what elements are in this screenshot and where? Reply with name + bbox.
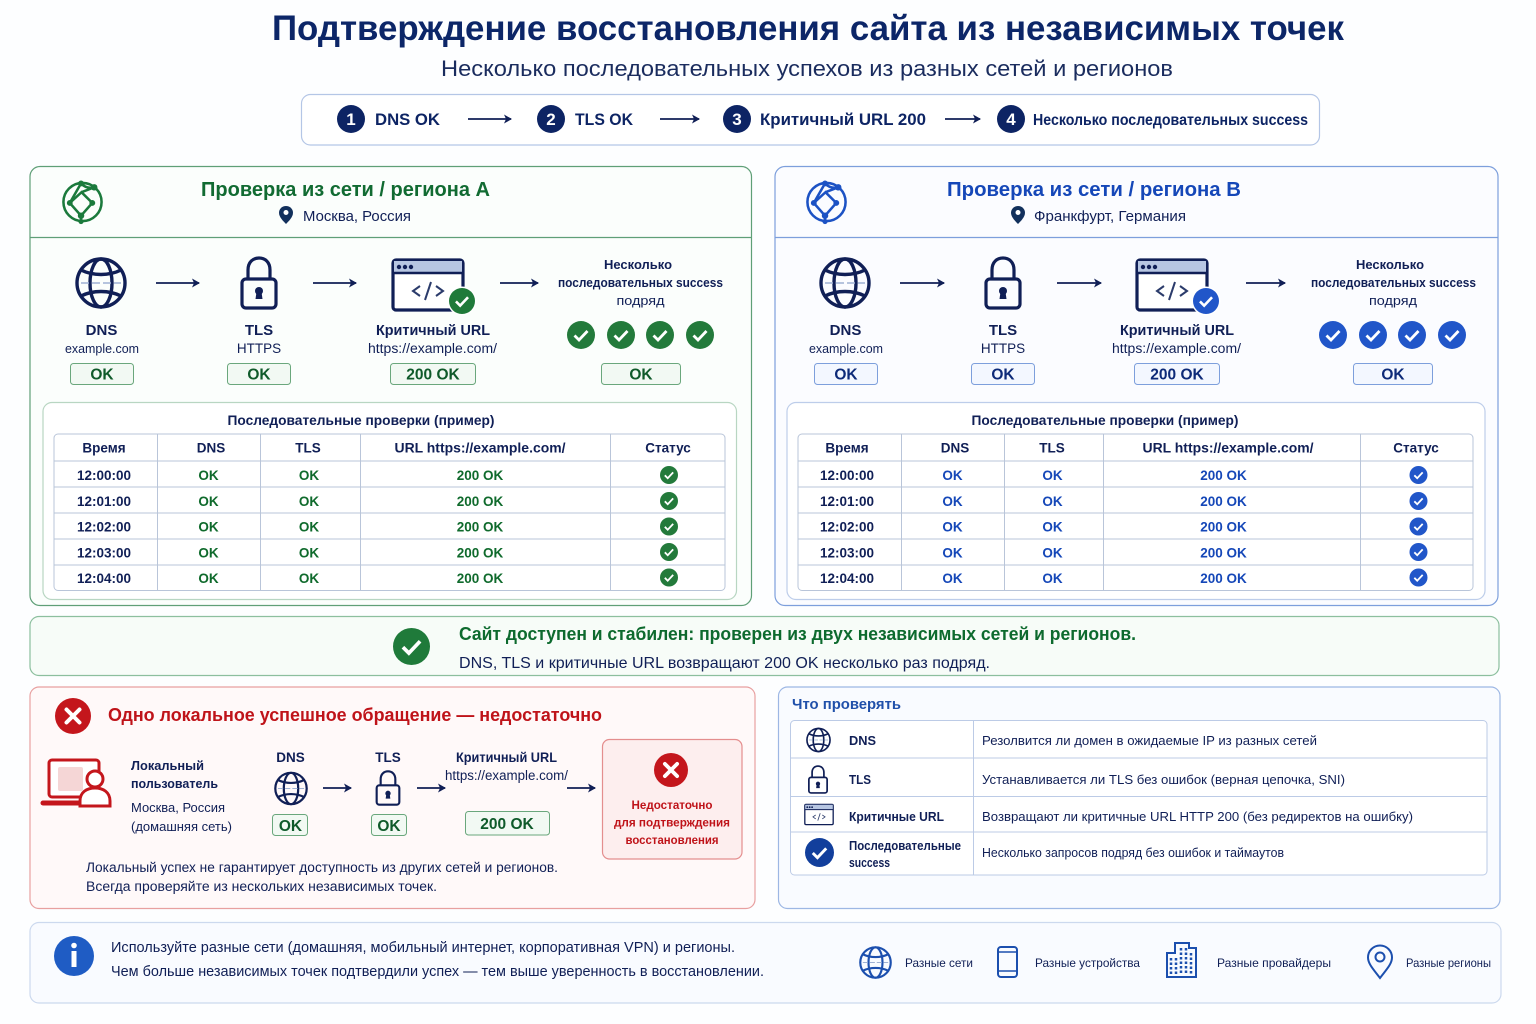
icon: check (393, 628, 430, 665)
arrow (945, 118, 980, 120)
panel: what to check (778, 687, 1500, 908)
table B: 200 OK (1200, 468, 1247, 483)
step DNS: OK (834, 366, 858, 384)
item: different devices: Разные устройства (1035, 956, 1140, 970)
table A: Последовательные проверки (пример) (228, 412, 494, 428)
row consecutive success: Несколько запросов подряд без ошибок и таймаутов (982, 845, 1284, 860)
item: different providers (1167, 943, 1331, 977)
step critical URL: Критичный URL (456, 750, 557, 765)
step critical URL: 200 OK (406, 366, 461, 384)
icon: lock (242, 258, 276, 308)
step 1: DNS OK (375, 110, 441, 129)
icon: red cross (55, 698, 91, 734)
step DNS: DNS (276, 750, 305, 765)
table B: 200 OK (1200, 494, 1247, 509)
step DNS (809, 322, 883, 384)
arrow (417, 787, 445, 789)
region A location: Москва, Россия (303, 209, 411, 225)
banner heading: Сайт доступен и стабилен: проверен из двух независимых сетей и регионов. (459, 624, 1136, 644)
table B (787, 402, 1485, 600)
table B: 12:03:00 (820, 546, 874, 560)
icon: local user laptop (43, 760, 110, 806)
row TLS: Устанавливается ли TLS без ошибок (верная цепочка, SNI) (982, 772, 1345, 787)
table B: 200 OK (1200, 520, 1247, 534)
step critical URL: https://example.com/ (445, 768, 568, 783)
step consecutive success: подряд (616, 293, 665, 308)
step TLS: TLS (245, 322, 273, 339)
table A: OK (198, 571, 219, 586)
step DNS (65, 322, 139, 384)
table B: Статус (1393, 440, 1439, 456)
table B: Время (825, 440, 869, 456)
step 1 (337, 105, 441, 133)
icon: lock (986, 258, 1020, 308)
step TLS: OK (247, 366, 271, 384)
icon: info (54, 936, 94, 976)
step 2 (537, 105, 634, 133)
table A: OK (299, 520, 319, 534)
table A: 200 OK (457, 571, 504, 586)
table A: 12:03:00 (77, 546, 131, 560)
table A: 12:00:00 (77, 468, 131, 483)
box: not enough: Недостаточно (632, 798, 712, 812)
table A: 200 OK (457, 520, 504, 534)
step critical URL (445, 750, 568, 835)
row consecutive success: success (849, 855, 890, 870)
table B: OK (942, 546, 963, 560)
region B heading: Проверка из сети / региона B (947, 179, 1241, 201)
arrow (660, 118, 699, 120)
table A: DNS (197, 440, 225, 456)
item: different networks: Разные сети (905, 956, 973, 970)
table A: OK (198, 520, 219, 534)
table B: OK (1042, 546, 1063, 560)
warning text (86, 860, 558, 894)
step DNS: example.com (809, 341, 883, 356)
table A: OK (198, 546, 219, 560)
step DNS: DNS (86, 322, 117, 339)
icon: globe (821, 259, 869, 307)
table A: URL https://example.com/ (394, 440, 566, 456)
row TLS: TLS (849, 772, 871, 787)
step 3 (723, 105, 926, 133)
arrow (313, 282, 356, 284)
table A: 200 OK (457, 468, 504, 483)
table B: OK (942, 520, 963, 534)
step TLS (972, 322, 1034, 384)
panel: region A (30, 166, 752, 606)
region A heading: Проверка из сети / региона A (201, 179, 490, 201)
info text: Чем больше независимых точек подтвердили успех — тем выше уверенность в восстановлении. (111, 963, 764, 980)
item: different regions: Разные регионы (1406, 956, 1491, 970)
icon: globe (77, 259, 125, 307)
step critical URL: 200 OK (1150, 366, 1205, 384)
arrow (323, 787, 351, 789)
arrow (900, 282, 944, 284)
step consecutive success: подряд (1369, 293, 1417, 308)
local user label: Москва, Россия (131, 800, 225, 815)
table B: OK (942, 468, 963, 483)
local user label: Локальный (131, 758, 204, 773)
step TLS: OK (377, 818, 401, 835)
step TLS: HTTPS (237, 341, 281, 356)
step DNS: DNS (830, 322, 861, 339)
step critical URL: https://example.com/ (368, 341, 497, 356)
arrow (567, 787, 595, 789)
arrow (156, 282, 199, 284)
step DNS: example.com (65, 341, 139, 356)
row critical URL (805, 804, 1413, 825)
table B: URL https://example.com/ (1142, 440, 1314, 456)
table A: OK (198, 494, 219, 509)
step 2: TLS OK (575, 110, 634, 129)
checks table (790, 720, 1487, 875)
box: not enough: для подтверждения (614, 816, 730, 830)
step 4: 4 (1006, 110, 1016, 129)
icon: browser window with check (393, 260, 476, 316)
row DNS: Резолвится ли домен в ожидаемые IP из разных сетей (982, 733, 1317, 748)
local user label: пользователь (131, 776, 218, 791)
table B: OK (1042, 571, 1063, 586)
panel: bottom info (30, 922, 1501, 1003)
item: different devices (998, 947, 1140, 977)
table B: OK (942, 571, 963, 586)
table B: 200 OK (1200, 571, 1247, 586)
step bar (302, 94, 1320, 145)
item: different regions (1368, 946, 1491, 978)
step DNS (272, 750, 308, 836)
icon: browser window with check (1137, 260, 1220, 316)
step consecutive success: последовательных success (558, 275, 723, 290)
item: different providers: Разные провайдеры (1217, 956, 1331, 970)
row critical URL: Критичные URL (849, 809, 944, 824)
table B: OK (1042, 520, 1063, 534)
red heading: Одно локальное успешное обращение — недостаточно (108, 705, 602, 725)
arrow (468, 118, 511, 120)
banner: site available (30, 616, 1499, 676)
panel: region B (775, 166, 1498, 606)
table B: Последовательные проверки (пример) (972, 412, 1238, 428)
info text (111, 939, 764, 980)
step consecutive success: последовательных success (1311, 275, 1476, 290)
subtitle: Несколько последовательных успехов из разных сетей и регионов (441, 56, 1173, 81)
arrow (1057, 282, 1101, 284)
panel: single local success not enough (30, 687, 755, 908)
row critical URL: Возвращают ли критичные URL HTTP 200 (без редиректов на ошибку) (982, 809, 1413, 824)
step consecutive success: Несколько (1356, 257, 1424, 272)
row consecutive success (805, 838, 1284, 870)
banner text: DNS, TLS и критичные URL возвращают 200 OK несколько раз подряд. (459, 655, 990, 672)
step TLS: OK (991, 366, 1015, 384)
row DNS: DNS (849, 733, 876, 748)
table A: 12:02:00 (77, 520, 131, 534)
box: not enough: восстановления (626, 833, 718, 847)
arrow (500, 282, 538, 284)
step TLS (372, 750, 406, 836)
table A: 200 OK (457, 546, 504, 560)
table A: OK (299, 468, 319, 483)
step critical URL (368, 322, 497, 384)
local user label: (домашняя сеть) (131, 819, 232, 834)
step critical URL: 200 OK (480, 816, 535, 833)
step DNS: OK (279, 818, 303, 835)
table B: OK (942, 494, 963, 509)
table B: OK (1042, 468, 1063, 483)
row consecutive success: Последовательные (849, 838, 961, 853)
row DNS (807, 728, 1317, 752)
icon: network globe blue (807, 180, 846, 224)
table B: 12:02:00 (820, 520, 874, 534)
step consecutive success: OK (1381, 366, 1405, 384)
step TLS (228, 322, 290, 384)
step critical URL: https://example.com/ (1112, 341, 1241, 356)
step TLS: HTTPS (981, 341, 1025, 356)
step consecutive success: OK (629, 366, 653, 384)
table A: OK (299, 571, 319, 586)
warning text: Всегда проверяйте из нескольких независимых точек. (86, 879, 437, 894)
region B location: Франкфурт, Германия (1034, 209, 1186, 225)
table B: 12:01:00 (820, 494, 874, 509)
warning text: Локальный успех не гарантирует доступность из других сетей и регионов. (86, 860, 558, 875)
step DNS: OK (90, 366, 114, 384)
title: Подтверждение восстановления сайта из независимых точек (272, 9, 1344, 48)
step TLS: TLS (375, 750, 401, 765)
table A: OK (198, 468, 219, 483)
info text: Используйте разные сети (домашняя, мобильный интернет, корпоративная VPN) и регионы. (111, 939, 735, 956)
row TLS (809, 766, 1345, 793)
step 2: 2 (546, 110, 556, 129)
step 3: Критичный URL 200 (760, 110, 926, 129)
table A: 200 OK (457, 494, 504, 509)
table A: 12:01:00 (77, 494, 131, 509)
table A: OK (299, 494, 319, 509)
table B: 200 OK (1200, 546, 1247, 560)
item: different networks (860, 947, 973, 978)
step 3: 3 (732, 110, 742, 129)
step critical URL (1112, 322, 1241, 384)
table A: OK (299, 546, 319, 560)
table A: Время (82, 440, 126, 456)
local user label (131, 758, 232, 834)
table B: DNS (941, 440, 969, 456)
step 4 (997, 105, 1308, 133)
table B: OK (1042, 494, 1063, 509)
what to check heading: Что проверять (792, 697, 901, 713)
table A: 12:04:00 (77, 571, 131, 586)
step 4: Несколько последовательных success (1033, 112, 1308, 129)
table A: TLS (295, 440, 321, 456)
step 1: 1 (346, 110, 356, 129)
step consecutive success: Несколько (604, 257, 672, 272)
region A location (279, 206, 411, 225)
icon: network globe green (63, 180, 102, 224)
step consecutive success (558, 257, 723, 384)
step TLS: TLS (989, 322, 1017, 339)
step critical URL: Критичный URL (376, 322, 490, 339)
arrow (1246, 282, 1285, 284)
step consecutive success (1311, 257, 1476, 384)
box: not enough (602, 740, 742, 859)
table A (43, 402, 736, 600)
table B: 12:00:00 (820, 468, 874, 483)
step critical URL: Критичный URL (1120, 322, 1234, 339)
table B: 12:04:00 (820, 571, 874, 586)
table A: Статус (645, 440, 691, 456)
table B: TLS (1039, 440, 1065, 456)
